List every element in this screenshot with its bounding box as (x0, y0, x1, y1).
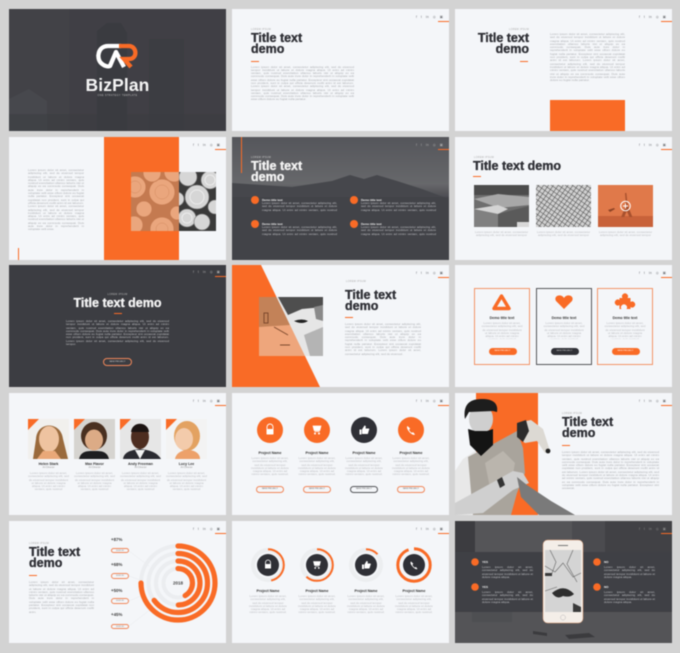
social header: f t in ◎ ▣ (416, 15, 443, 19)
member 3 (120, 462, 161, 492)
slide 1: cover (9, 9, 226, 131)
item 4 (349, 219, 436, 236)
photo left tinted (259, 297, 305, 356)
radial progress chart (9, 521, 226, 644)
photo: lattice (536, 185, 591, 227)
slide 9: three cards (455, 265, 672, 387)
project 3 (345, 450, 383, 494)
card button: NEW PROJECT (557, 350, 572, 352)
social header: f t in ◎ ▣ (416, 399, 443, 403)
accent dash (562, 445, 570, 446)
item 4 (394, 589, 434, 617)
item 2 (297, 589, 337, 617)
title: demo (562, 426, 595, 440)
title: demo (345, 298, 378, 312)
photo right grayscale (276, 297, 323, 356)
pill 3: 2018 OK (116, 600, 124, 602)
orange column (104, 137, 179, 260)
social header: f t in ◎ ▣ (193, 270, 220, 274)
slide 15: phone mockup (455, 521, 672, 643)
item 2 (250, 219, 338, 236)
man arm (455, 471, 529, 515)
tagline: ONE STRATEGY TEMPLATE (98, 94, 137, 97)
title: demo (251, 170, 284, 184)
label: LOREM IPSUM (251, 28, 271, 31)
pill 1 (111, 548, 129, 553)
social header: f t in ◎ ▣ (193, 399, 220, 403)
project 2: Project Name (306, 451, 328, 455)
card button (612, 348, 640, 355)
title: Title text (29, 544, 80, 558)
project 2: NEW PROJECT (309, 488, 325, 490)
title: demo (251, 42, 284, 56)
slide 2: title and text (232, 9, 449, 131)
title: Title text (562, 415, 613, 429)
brand name: BizPlan (86, 75, 149, 95)
phone photo background (455, 521, 672, 644)
slide 4: orange column with wood photo (9, 137, 226, 260)
slide 8: diagonal orange with photo (232, 265, 449, 387)
item 3 (349, 195, 436, 212)
title (344, 288, 397, 312)
member 1: Helen Stark (39, 462, 58, 466)
accent line (241, 137, 242, 173)
member 2: Art Director (88, 466, 101, 469)
man head (469, 404, 493, 434)
slide 10: team (9, 393, 226, 515)
member 1: Art Director (42, 466, 55, 469)
project 3: Project Name (352, 451, 375, 455)
accent dash (114, 313, 122, 314)
slide 6: three photos (455, 137, 672, 260)
body text: Lorem ipsum dolor sit amet, consectetur adipiscing elit, sed do eiusmod tempor incididunt ut labore et dolore magna aliqua. Ut enim ad minim veniam, quis nostrud exercitation ullamco laboris nisi ut aliquip ex ea commodo consequat. Duis aute irure dolor in reprehenderit in voluptate velit esse cillum dolore eu fugiat nulla pariatur. Excepteur sint occaecat cupidatat non proident, sunt in culpa qui officia deserunt mollit anim id est laborum. Lorem ipsum dolor sit amet, consectetur adipiscing elit, sed do eiusmod tempor incididunt ut labore et dolore magna aliqua. Ut enim ad minim veniam, quis nostrud exercitation ullamco laboris nisi ut aliquip ex ea commodo consequat. Duis aute irure dolor in reprehenderit in voluptate velit esse cillum dolore eu fugiat nulla pariatur. Excepteur sint occaecat. (562, 451, 659, 490)
icon: lock (257, 417, 283, 443)
item 1 (250, 195, 338, 212)
item 4: Project Name (402, 589, 425, 593)
point 4 (593, 583, 656, 605)
member 2: Max Flavor (85, 462, 104, 466)
title: Title text demo (74, 296, 161, 310)
shirt (455, 451, 485, 515)
social header: f t in ◎ ▣ (639, 143, 666, 147)
ring: phone (398, 549, 430, 581)
accent dash (251, 61, 259, 62)
photos row (473, 184, 654, 228)
social header: f t in ◎ ▣ (639, 527, 666, 531)
project 1 (251, 450, 289, 494)
social header: f t in ◎ ▣ (639, 271, 666, 275)
item 4: Demo title text (361, 222, 382, 226)
title (250, 158, 303, 184)
social header: f t in ◎ ▣ (193, 143, 220, 147)
portrait: Lucy (166, 419, 207, 459)
item 1: Demo title text (262, 198, 283, 202)
slide 14: progress icons (232, 521, 449, 643)
card 3 (597, 288, 653, 365)
card button (550, 348, 578, 355)
radial progress chart: 2018 (173, 580, 184, 586)
item 3: Project Name (354, 589, 377, 593)
project 4: NEW PROJECT (403, 488, 419, 490)
label: LOREM IPSUM (29, 542, 49, 544)
item 3: Demo title text (361, 198, 382, 202)
body text: Lorem ipsum dolor sit amet, consectetur adipiscing elit, sed do eiusmod tempor incididunt ut labore et dolore magna aliqua. Ut enim ad minim veniam, quis nostrud exercitation ullamco laboris nisi ut aliquip ex ea commodo consequat. Duis aute irure dolor in reprehenderit in voluptate velit esse cillum dolore eu fugiat nulla pariatur. Excepteur sint occaecat cupidatat non proident, sunt in culpa qui officia deserunt mollit anim id est laborum. Lorem ipsum dolor sit amet, consectetur adipiscing elit, sed do eiusmod tempor incididunt ut labore et dolore magna aliqua. Ut enim ad minim veniam, quis nostrud exercitation ullamco laboris nisi ut aliquip ex ea commodo consequat. Duis aute irure dolor in reprehenderit in voluptate velit esse cillum dolore eu fugiat nulla pariatur. (550, 33, 625, 82)
portrait: Max (74, 419, 115, 459)
logo mark (96, 43, 138, 70)
point 2: YES (482, 585, 488, 589)
card button: NEW PROJECT (618, 350, 633, 352)
card title: Demo title text (552, 316, 576, 320)
orange block (550, 100, 625, 131)
stat +45%: +45% (111, 612, 122, 616)
card 2 (536, 288, 592, 365)
title: Title text (251, 158, 302, 172)
slide 3: right aligned title with orange block (455, 9, 672, 131)
accent dash (520, 61, 528, 62)
card button: NEW PROJECT (495, 350, 510, 352)
dog body (468, 431, 525, 515)
slide 7: dark centered title (9, 265, 226, 387)
icon: cart (304, 417, 330, 443)
ring: thumb (350, 549, 382, 581)
member 3: Art Director (134, 466, 147, 469)
item 3 (346, 589, 386, 617)
item 1: Project Name (256, 589, 279, 593)
stat +50%: +50% (111, 588, 122, 592)
member 4: Art Director (180, 466, 193, 469)
point 1: YES (482, 560, 488, 564)
point 1 (471, 558, 534, 580)
pill 4: 2018 OK (116, 626, 124, 628)
portraits (27, 418, 201, 460)
social header: f t in ◎ ▣ (416, 271, 443, 275)
title: demo (496, 42, 529, 56)
body text: Lorem ipsum dolor sit amet, consectetur adipiscing elit, sed do eiusmod tempor incididunt ut labore et dolore magna aliqua. Ut enim ad minim veniam, quis nostrud exercitation ullamco laboris nisi ut aliquip ex ea commodo consequat. Duis aute irure dolor in reprehenderit in voluptate velit esse cillum dolore eu fugiat nulla pariatur. Excepteur sint occaecat cupidatat non proident, sunt in culpa qui officia deserunt mollit anim. (29, 581, 94, 614)
social header: f t in ◎ ▣ (193, 527, 220, 531)
social header: f t in ◎ ▣ (639, 15, 666, 19)
member 3: Andy Freeman (128, 462, 153, 466)
cover background city (10, 90, 46, 114)
project 3: NEW PROJECT (356, 488, 372, 490)
accent dash (345, 317, 353, 318)
card button (488, 348, 516, 355)
body text: Lorem ipsum dolor sit amet, consectetur adipiscing elit, sed do eiusmod tempor incididunt ut labore et dolore magna aliqua. Ut enim ad minim veniam, quis nostrud exercitation ullamco laboris nisi ut aliquip ex ea commodo consequat. Duis aute irure dolor in reprehenderit in voluptate velit esse cillum dolore eu fugiat nulla pariatur. Excepteur sint occaecat cupidatat non proident, sunt in culpa qui officia deserunt mollit anim id est laborum. Lorem ipsum dolor sit amet, consectetur adipiscing elit, sed do eiusmod tempor incididunt ut labore et dolore magna aliqua. Ut enim ad minim veniam, quis nostrud exercitation ullamco laboris nisi ut aliquip ex ea commodo consequat. Duis aute irure dolor in reprehenderit in voluptate velit esse. (28, 169, 84, 231)
button: NEW PROJECT (110, 361, 125, 363)
title (250, 30, 303, 56)
pill 1: 2018 OK (116, 550, 124, 552)
slide 11: project icons (232, 393, 449, 515)
title: Title text (251, 30, 302, 44)
body text: Lorem ipsum dolor sit amet, consectetur adipiscing elit, sed do eiusmod tempor incididunt ut labore et dolore magna aliqua. Ut enim ad minim veniam, quis nostrud exercitation ullamco laboris nisi ut aliquip ex ea commodo consequat. Duis aute irure dolor in reprehenderit in voluptate velit esse cillum dolore eu fugiat nulla pariatur. Excepteur sint occaecat cupidatat non proident, sunt in culpa qui officia deserunt mollit anim id est laborum. Lorem ipsum dolor sit amet, consectetur adipiscing elit, sed do eiusmod tempor incididunt ut labore et dolore magna aliqua. Ut enim ad minim veniam, quis nostrud exercitation ullamco laboris nisi ut aliquip ex ea commodo consequat. Duis aute irure dolor in reprehenderit in voluptate velit esse cillum dolore eu fugiat nulla pariatur. (251, 66, 354, 101)
item 2: Project Name (306, 589, 328, 593)
progress icon rings (232, 521, 449, 644)
project 4: Project Name (400, 451, 422, 455)
accent dash (29, 575, 37, 576)
title (561, 415, 614, 440)
dog head (517, 420, 550, 453)
title: demo (29, 556, 62, 570)
photo: concrete blocks (474, 185, 529, 227)
phone (455, 521, 672, 644)
label: LOREM IPSUM (562, 412, 582, 414)
social header: f t in ◎ ▣ (416, 527, 443, 531)
label: LOREM IPSUM (509, 28, 529, 31)
item 1 (248, 589, 288, 617)
tattooed forearm (517, 477, 575, 515)
point 3 (593, 558, 656, 580)
slide 13: radial chart (9, 521, 226, 643)
orange column (476, 393, 538, 515)
title (477, 30, 530, 56)
icon: thumb up (351, 417, 377, 443)
icon: puzzle (614, 292, 636, 310)
pill 4 (111, 624, 129, 629)
label: LOREM IPSUM (346, 280, 366, 282)
pill 3 (111, 598, 129, 604)
card 1 (474, 288, 530, 365)
point 3: NO (604, 560, 608, 564)
card title: Demo title text (613, 316, 637, 320)
slide 5: dark mountain with list (232, 137, 449, 260)
wood logs photo (130, 171, 217, 232)
slide 12: man with dog (455, 393, 672, 515)
title: Title text (478, 30, 529, 44)
icon circles (256, 416, 425, 444)
card title: Demo title text (490, 316, 514, 320)
member 1 (28, 462, 69, 492)
stat +68%: +68% (111, 562, 122, 566)
social header: f t in ◎ ▣ (639, 399, 666, 403)
ring: lock (252, 549, 284, 581)
member 2 (74, 462, 115, 492)
accent line (18, 248, 19, 260)
accent dash (473, 176, 481, 177)
project 2 (298, 450, 336, 494)
social header: f t in ◎ ▣ (416, 143, 443, 147)
portrait: Helen (28, 419, 69, 459)
pill 2 (111, 573, 129, 578)
title: Title text demo (473, 158, 561, 172)
project 4 (392, 450, 430, 494)
icon: recycle triangle (492, 294, 512, 312)
label: LOREM IPSUM (107, 292, 128, 296)
photo: orange Eiffel tower (598, 185, 653, 227)
member 4: Lucy Lee (179, 462, 194, 466)
point 4: NO (604, 585, 608, 589)
icon: phone (398, 417, 424, 443)
body text: Lorem ipsum dolor sit amet, consectetur adipiscing elit, sed do eiusmod tempor incididunt ut labore et dolore magna aliqua. Ut enim ad minim veniam, quis nostrud exercitation ullamco laboris nisi ut aliquip ex ea commodo consequat. Duis aute irure dolor in reprehenderit in voluptate velit esse cillum dolore eu fugiat nulla pariatur. Excepteur sint occaecat cupidatat non proident, sunt in culpa qui officia deserunt mollit anim id est laborum. Lorem ipsum dolor sit amet, consectetur adipiscing elit, sed do eiusmod. (345, 323, 421, 356)
project 1: Project Name (258, 451, 281, 455)
icon: heart (554, 294, 574, 310)
member 4 (166, 462, 207, 492)
mountain background (232, 137, 450, 198)
label: LOREM IPSUM (251, 156, 271, 159)
title (29, 546, 80, 568)
point 2 (471, 583, 534, 605)
photo: man and dog (454, 398, 575, 516)
button (103, 358, 132, 366)
stat +87%: +87% (111, 536, 122, 542)
label: LOREM IPSUM (474, 156, 494, 159)
project 1: NEW PROJECT (262, 488, 278, 490)
portrait: Andy (120, 419, 161, 459)
title: Title text (345, 288, 396, 302)
orange diagonal shape (231, 264, 324, 388)
item 2: Demo title text (262, 222, 283, 226)
pill 2: 2018 OK (116, 575, 124, 577)
ring: cart (301, 549, 333, 581)
